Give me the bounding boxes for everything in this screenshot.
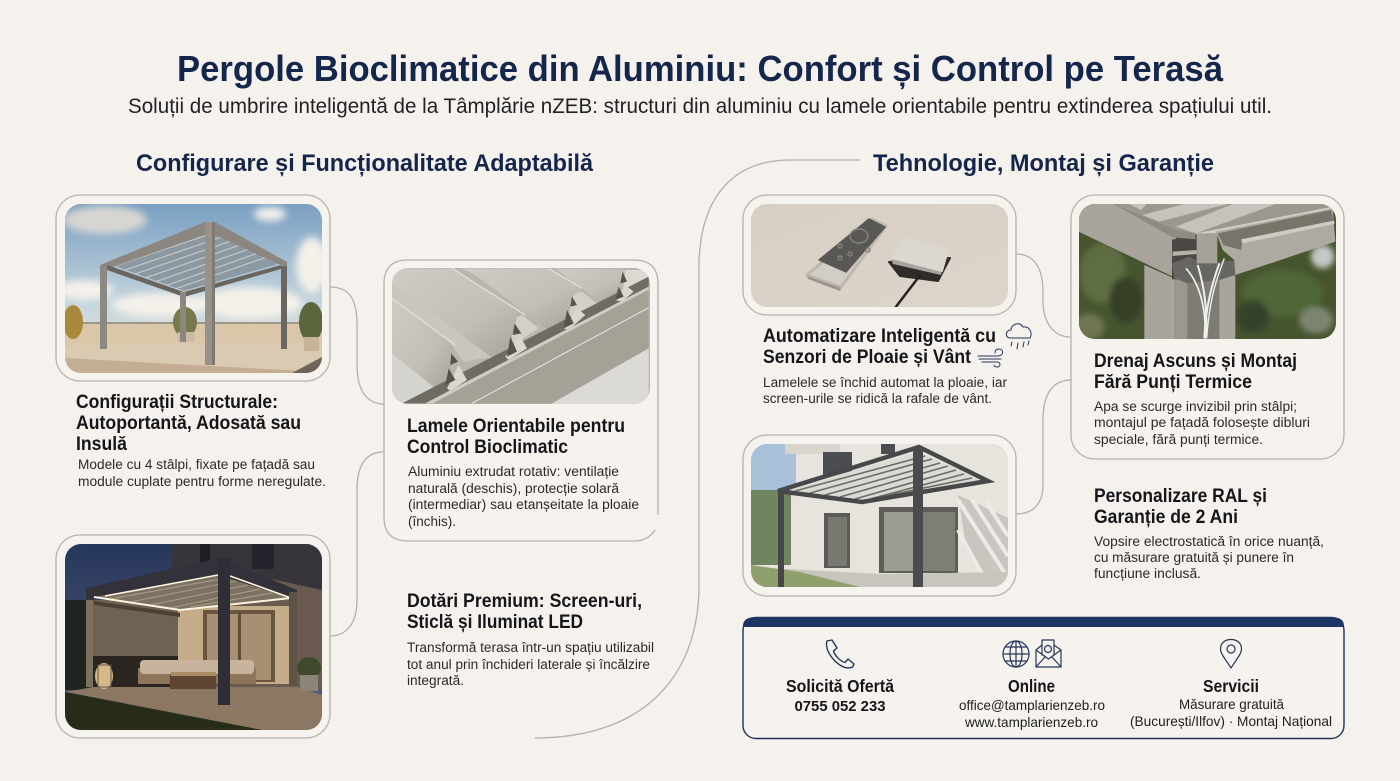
text: smart automation: screen-urile se ridică la rafale de vânt. — [763, 391, 992, 406]
panel: structural configurations — [56, 195, 330, 381]
text: structural configurations: Modele cu 4 stâlpi, fixate pe fațadă sau — [78, 457, 315, 472]
icon: location pin — [1220, 640, 1242, 668]
contact: phone — [786, 676, 894, 715]
text: orientable louvers: (intermediar) sau etanșeitate la ploaie — [408, 497, 639, 512]
text: smart automation: Automatizare Inteligentă cu — [763, 325, 996, 347]
text: RAL and warranty: Vopsire electrostatică în orice nuanță, — [1094, 534, 1324, 549]
contact: phone: 0755 052 233 — [794, 698, 886, 715]
photo: louver profile — [392, 265, 654, 407]
text: premium features: tot anul prin închideri laterale și încălzire — [407, 657, 650, 672]
connector: lamele to card 3 — [330, 452, 384, 636]
photo: hidden gutter — [1074, 200, 1339, 342]
panel: night pergola — [56, 535, 330, 738]
text: RAL and warranty: Garanție de 2 Ani — [1094, 506, 1238, 528]
text: drainage: speciale, fără punți termice. — [1094, 432, 1263, 447]
icon: wind — [978, 349, 1003, 367]
text: smart automation: Senzori de Ploaie și Vânt — [763, 346, 971, 368]
text: RAL and warranty: Personalizare RAL și — [1094, 485, 1267, 507]
contact: phone: Solicită Ofertă — [786, 676, 894, 696]
contact: services: (București/Ilfov) · Montaj Național — [1130, 713, 1332, 729]
text: RAL and warranty — [1094, 485, 1324, 581]
subtitle: Soluții de umbrire inteligentă de la Tâmplărie nZEB: structuri din aluminiu cu lamele orientabile pentru extinderea spațiului util. — [128, 94, 1272, 118]
panel: contact — [743, 617, 1344, 738]
text: premium features: Transformă terasa într-un spațiu utilizabil — [407, 640, 654, 655]
text: smart automation: Lamelele se închid automat la ploaie, iar — [763, 375, 1007, 390]
text: RAL and warranty: cu măsurare gratuită și punere în — [1094, 550, 1294, 565]
text: drainage — [1094, 350, 1310, 447]
text: orientable louvers: naturală (deschis), protecție solară — [408, 481, 619, 496]
connector: card 1 to lamele — [330, 287, 384, 404]
contact: online: www.tamplarienzeb.ro — [964, 714, 1098, 730]
contact: online: office@tamplarienzeb.ro — [959, 697, 1105, 713]
text: smart automation — [763, 325, 1007, 406]
text: drainage: Drenaj Ascuns și Montaj — [1094, 350, 1297, 372]
text: RAL and warranty: funcțiune inclusă. — [1094, 566, 1201, 581]
panel: orientable louvers — [384, 260, 662, 541]
text: orientable louvers: (închis). — [408, 514, 456, 529]
contact: online — [959, 676, 1105, 730]
heading: left section: Configurare și Funcționalitate Adaptabilă — [136, 150, 594, 177]
icon: globe — [1003, 641, 1029, 667]
text: orientable louvers: Lamele Orientabile pentru — [407, 415, 625, 437]
text: premium features — [407, 590, 654, 688]
heading: right section: Tehnologie, Montaj și Garanție — [873, 150, 1214, 177]
text: premium features: integrată. — [407, 673, 464, 688]
text: structural configurations: Insulă — [76, 433, 127, 455]
icon: envelope — [1036, 640, 1061, 667]
photo: attached pergola — [751, 444, 1008, 587]
text: drainage: Fără Punți Termice — [1094, 371, 1252, 393]
contact: services — [1130, 676, 1332, 729]
icon: rain cloud — [1006, 324, 1031, 349]
panel: house pergola — [743, 435, 1016, 596]
text: structural configurations: Autoportantă, Adosată sau — [76, 412, 301, 434]
title: Pergole Bioclimatice din Aluminiu: Confort și Control pe Terasă — [177, 48, 1224, 89]
text: orientable louvers: Aluminiu extrudat rotativ: ventilație — [408, 464, 619, 479]
contact: online: Online — [1008, 676, 1055, 696]
photo: remote and sensor — [751, 204, 1008, 308]
text: structural configurations — [76, 391, 326, 489]
connector: remote to drain — [1016, 254, 1071, 337]
panel: drainage — [1071, 195, 1344, 459]
icon: phone — [826, 640, 854, 668]
connector: drain to house — [1016, 380, 1071, 514]
photo: evening terrace — [65, 544, 322, 730]
text: drainage: Apa se scurge invizibil prin stâlpi; — [1094, 399, 1297, 414]
text: drainage: montajul pe fațadă folosește dibluri — [1094, 415, 1310, 430]
contact: services: Măsurare gratuită — [1179, 696, 1284, 712]
text: premium features: Dotări Premium: Screen-uri, — [407, 590, 642, 612]
photo: rooftop pergola — [57, 204, 328, 373]
text: premium features: Sticlă și Iluminat LED — [407, 611, 583, 633]
text: orientable louvers: Control Bioclimatic — [407, 436, 568, 458]
text: orientable louvers — [407, 415, 639, 529]
text: structural configurations: Configurații Structurale: — [76, 391, 278, 413]
text: structural configurations: module cuplate pentru forme neregulate. — [78, 474, 326, 489]
contact: services: Servicii — [1203, 676, 1259, 696]
panel: smart automation — [743, 195, 1016, 315]
connector: main divider curve — [535, 160, 860, 738]
